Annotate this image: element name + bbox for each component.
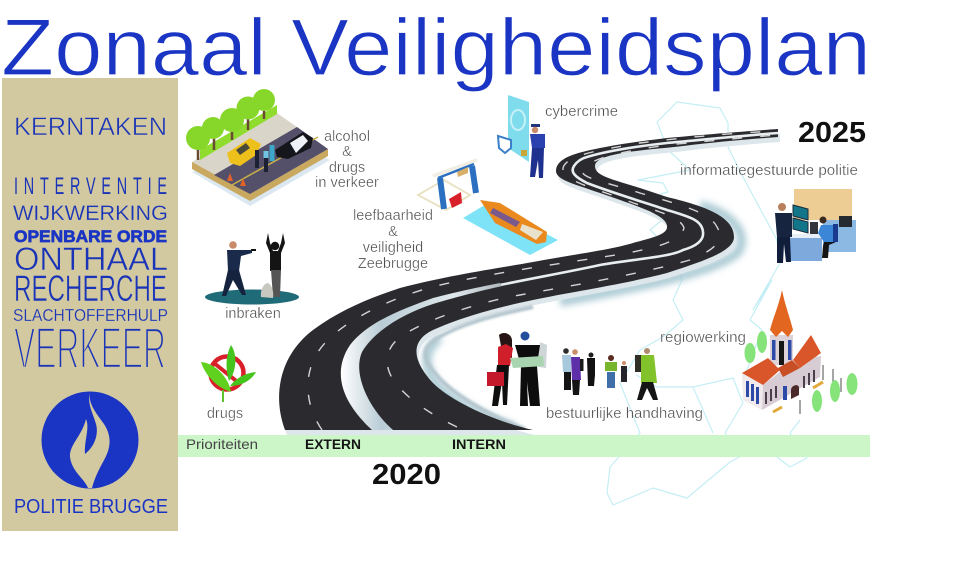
label: alcohol & drugs in verkeer: in verkeer [315,175,379,191]
icon: drugs prohibited [201,345,256,402]
background map outline [607,102,807,505]
label: prioriteiten: Prioriteiten [186,436,258,452]
task: wijkwerking: WIJKWERKING [13,201,168,225]
label: intern: INTERN [452,437,506,452]
road median lower [341,283,502,430]
task: interventie: INTERVENTIE [14,173,167,200]
icon: citizens group [487,332,658,406]
year 2020: 2020 [372,459,441,491]
icon: police control room [775,189,856,263]
heading: kerntaken: KERNTAKEN [14,113,167,141]
label: cybercrime: cybercrime [545,104,618,120]
label: regiowerking: regiowerking [660,330,746,346]
label: alcohol & drugs in verkeer [315,129,379,191]
label: leefbaarheid & veiligheid Zeebrugge: leefbaarheid [353,208,433,224]
task: onthaal: ONTHAAL [14,241,168,277]
label: leefbaarheid & veiligheid Zeebrugge: veiligheid [363,240,423,256]
logo caption: POLITIE BRUGGE [14,496,168,518]
task: openbare orde: OPENBARE ORDE [14,227,167,246]
label: alcohol & drugs in verkeer: alcohol [324,129,370,145]
task: recherche: RECHERCHE [14,268,167,309]
road curb shading [425,307,533,429]
icon: accident scene [186,89,330,206]
road lane dashes right [387,135,778,427]
winding road [279,129,778,430]
task: verkeer: VERKEER [14,316,166,381]
label: bestuurlijke handhaving: bestuurlijke handhaving [546,406,703,422]
label: leefbaarheid & veiligheid Zeebrugge: Zeebrugge [358,256,428,272]
label: alcohol & drugs in verkeer: drugs [329,160,365,176]
label: informatiegestuurde politie: informatiegestuurde politie [680,163,858,179]
icon: police flame logo [42,392,138,488]
label: extern: EXTERN [305,437,361,452]
band: prioriteiten [178,435,870,457]
year 2025: 2025 [798,117,866,149]
label: drugs: drugs [207,406,243,422]
church trees [744,331,858,412]
title: Zonaal Veiligheidsplan [1,3,871,93]
road lip [281,134,780,435]
label: alcohol & drugs in verkeer: & [342,144,352,160]
panel: kerntaken sidebar [2,78,178,531]
icon: burglary arrest [205,233,299,304]
label: leefbaarheid & veiligheid Zeebrugge [353,208,433,272]
label: leefbaarheid & veiligheid Zeebrugge: & [388,224,398,240]
task: slachtofferhulp: SLACHTOFFERHULP [13,305,168,325]
road surface [279,129,778,430]
label: inbraken: inbraken [225,306,281,322]
icon: crane and container ship [418,160,558,255]
icon: church [742,290,858,414]
icon: cybercrime officer [498,95,545,178]
road lane dashes left [308,131,778,430]
road median upper [433,133,778,301]
road shadow [427,205,741,428]
